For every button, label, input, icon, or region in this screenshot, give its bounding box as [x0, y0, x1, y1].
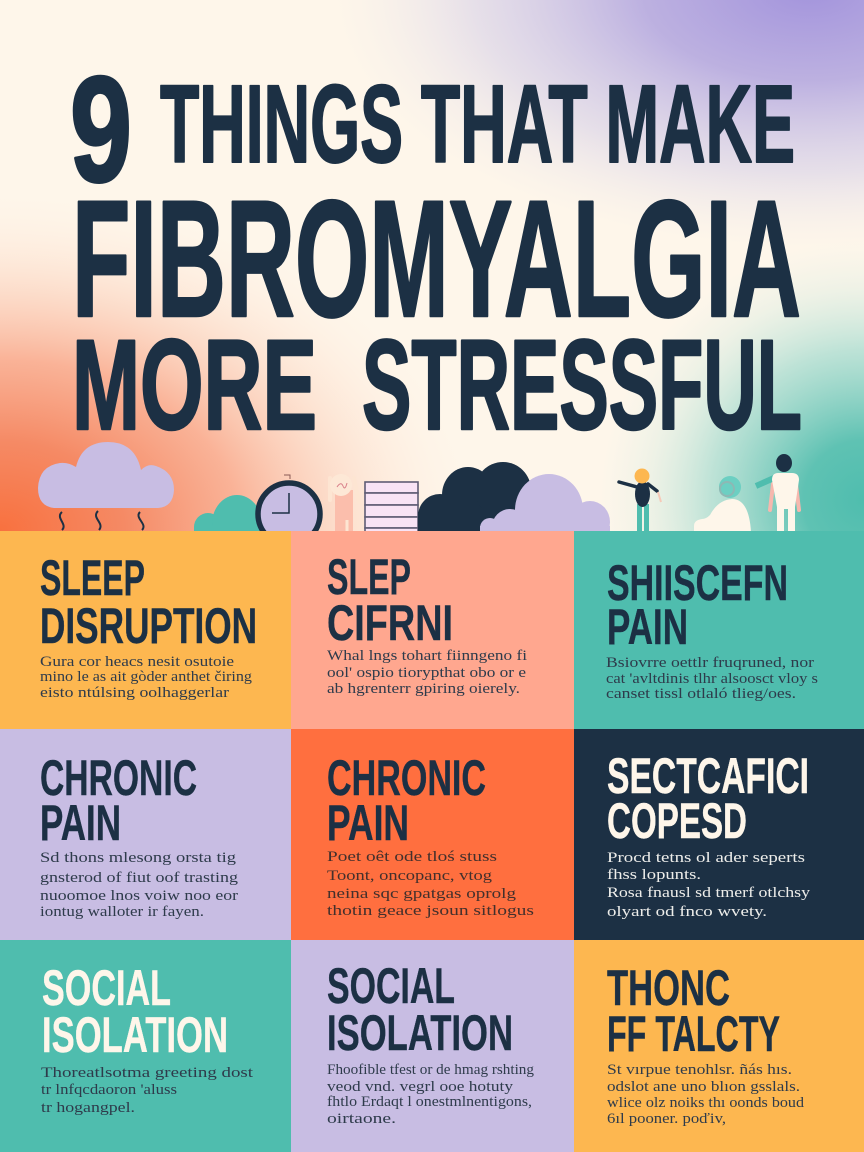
heading — [40, 550, 257, 654]
icon: clock — [258, 475, 320, 545]
text block: wlice olz noiks thı oonds boud — [607, 1095, 805, 1111]
text block: canset tissl otlaló tlieg/oes. — [606, 686, 796, 702]
heading: PAIN — [607, 599, 688, 655]
text block: nuoomoe lnos voiw noo eor — [40, 888, 238, 904]
text block — [41, 1065, 254, 1116]
text block: gnsterod of fiut oof trasting — [40, 870, 239, 886]
heading: DISRUPTION — [40, 598, 257, 654]
text block: veod vnd. vegrl ooe hotuty — [327, 1079, 514, 1095]
icon: person with raised arm — [619, 468, 661, 531]
panel: social isolation, lavender — [291, 940, 574, 1152]
text block: olyart od fnco wvety. — [607, 904, 767, 920]
panel: sleep disruption — [0, 531, 291, 729]
title: 9 — [70, 45, 132, 213]
text block — [327, 648, 527, 697]
panel: slep cifrni — [291, 531, 574, 729]
heading — [327, 549, 453, 651]
heading — [40, 750, 197, 851]
heading — [42, 960, 228, 1063]
text block: thotin geace jsoun sitlogus — [327, 903, 534, 919]
text block: mino le as ait gòder anthet čiring — [40, 669, 253, 685]
text block: 6ıl pooner. poďiv, — [607, 1111, 726, 1127]
text block: Rosa fnausl sd tmerf otlchsy — [607, 885, 811, 901]
heading: COPESD — [607, 793, 747, 849]
panel: sectcafici copesd — [574, 729, 864, 940]
panel: chronic pain, lavender — [0, 729, 291, 940]
text block: oirtaone. — [327, 1111, 396, 1127]
heading: ISOLATION — [42, 1007, 228, 1063]
text block: odslot ane uno blıon gsslals. — [607, 1079, 800, 1095]
icon: chest of drawers — [365, 482, 418, 532]
heading — [607, 555, 788, 655]
heading — [607, 960, 780, 1062]
heading: CHRONIC — [327, 750, 486, 806]
heading — [607, 748, 809, 849]
panel: shiiscefn pain — [574, 531, 864, 729]
heading: SOCIAL — [327, 958, 455, 1014]
background gradient — [0, 0, 864, 532]
text block: Sd thons mlesong orsta tig — [40, 850, 237, 866]
heading: PAIN — [327, 795, 409, 851]
text block: Toont, oncopanc, vtog — [327, 868, 493, 884]
icon: dark cloud — [418, 462, 531, 538]
text block — [607, 1062, 805, 1127]
text block: neina sqc gpatgas oprolg — [327, 886, 517, 902]
text block — [327, 1062, 534, 1127]
text block: tr hogangpel. — [41, 1100, 135, 1116]
icon: rain cloud — [38, 442, 174, 530]
text block: ab hgrenterr gpiring oierely. — [327, 681, 520, 697]
icon: pale figure — [330, 474, 359, 532]
text block: ool' ospio tiorypthat obo or e — [327, 665, 526, 681]
text block: Thoreatlsotma greeting dost — [41, 1065, 254, 1081]
text block: eisto ntúlsing oolhaggerlar — [40, 685, 229, 701]
icon: standing person — [756, 454, 799, 531]
text block — [607, 850, 811, 920]
text block: Bsiovrre oettlr fruqruned, nor — [606, 655, 814, 671]
panel: thonc ff talcty — [574, 940, 864, 1152]
text block — [327, 849, 534, 919]
title: MORE — [72, 314, 317, 457]
illustration strip — [38, 442, 799, 553]
text block: Whal lngs tohart fiinngeno fi — [327, 648, 527, 664]
heading — [327, 750, 486, 851]
text block: Poet oêt ode tloś stuss — [327, 849, 497, 865]
heading: SLEP — [327, 549, 411, 605]
icon: lavender cloud — [480, 474, 610, 546]
heading: CIFRNI — [327, 595, 453, 651]
text block: fhss lopunts. — [607, 867, 701, 883]
heading: ISOLATION — [327, 1005, 513, 1061]
panel: social isolation, teal — [0, 940, 291, 1152]
text block: cat 'avltdinis tlhr alsoosct vloy s — [606, 671, 818, 687]
text block: fhtlo Erdaqt l onestmlnentigons, — [327, 1094, 532, 1110]
icon: seated figure — [694, 476, 751, 532]
text block: tr lnfqcdaoron 'aluss — [41, 1082, 177, 1098]
text block — [40, 850, 239, 920]
heading: PAIN — [40, 795, 121, 851]
heading: CHRONIC — [40, 750, 197, 806]
text block — [40, 654, 253, 701]
text block: iontug walloter ir fayen. — [40, 904, 204, 920]
text block: St vırpue tenohlsr. ñás hıs. — [607, 1062, 792, 1078]
heading: SLEEP — [40, 550, 145, 606]
title — [70, 45, 802, 457]
text block — [606, 655, 818, 702]
heading — [327, 958, 513, 1061]
text block: Procd tetns ol ader seperts — [607, 850, 805, 866]
text block: Fhoofible tfest or de hmag rshting — [327, 1062, 534, 1078]
heading: THONC — [607, 960, 730, 1016]
panel: chronic pain, orange — [291, 729, 574, 940]
heading: SOCIAL — [42, 960, 171, 1016]
icon: teal bush — [194, 495, 262, 553]
text block: Gura cor heacs nesit osutoie — [40, 654, 234, 670]
